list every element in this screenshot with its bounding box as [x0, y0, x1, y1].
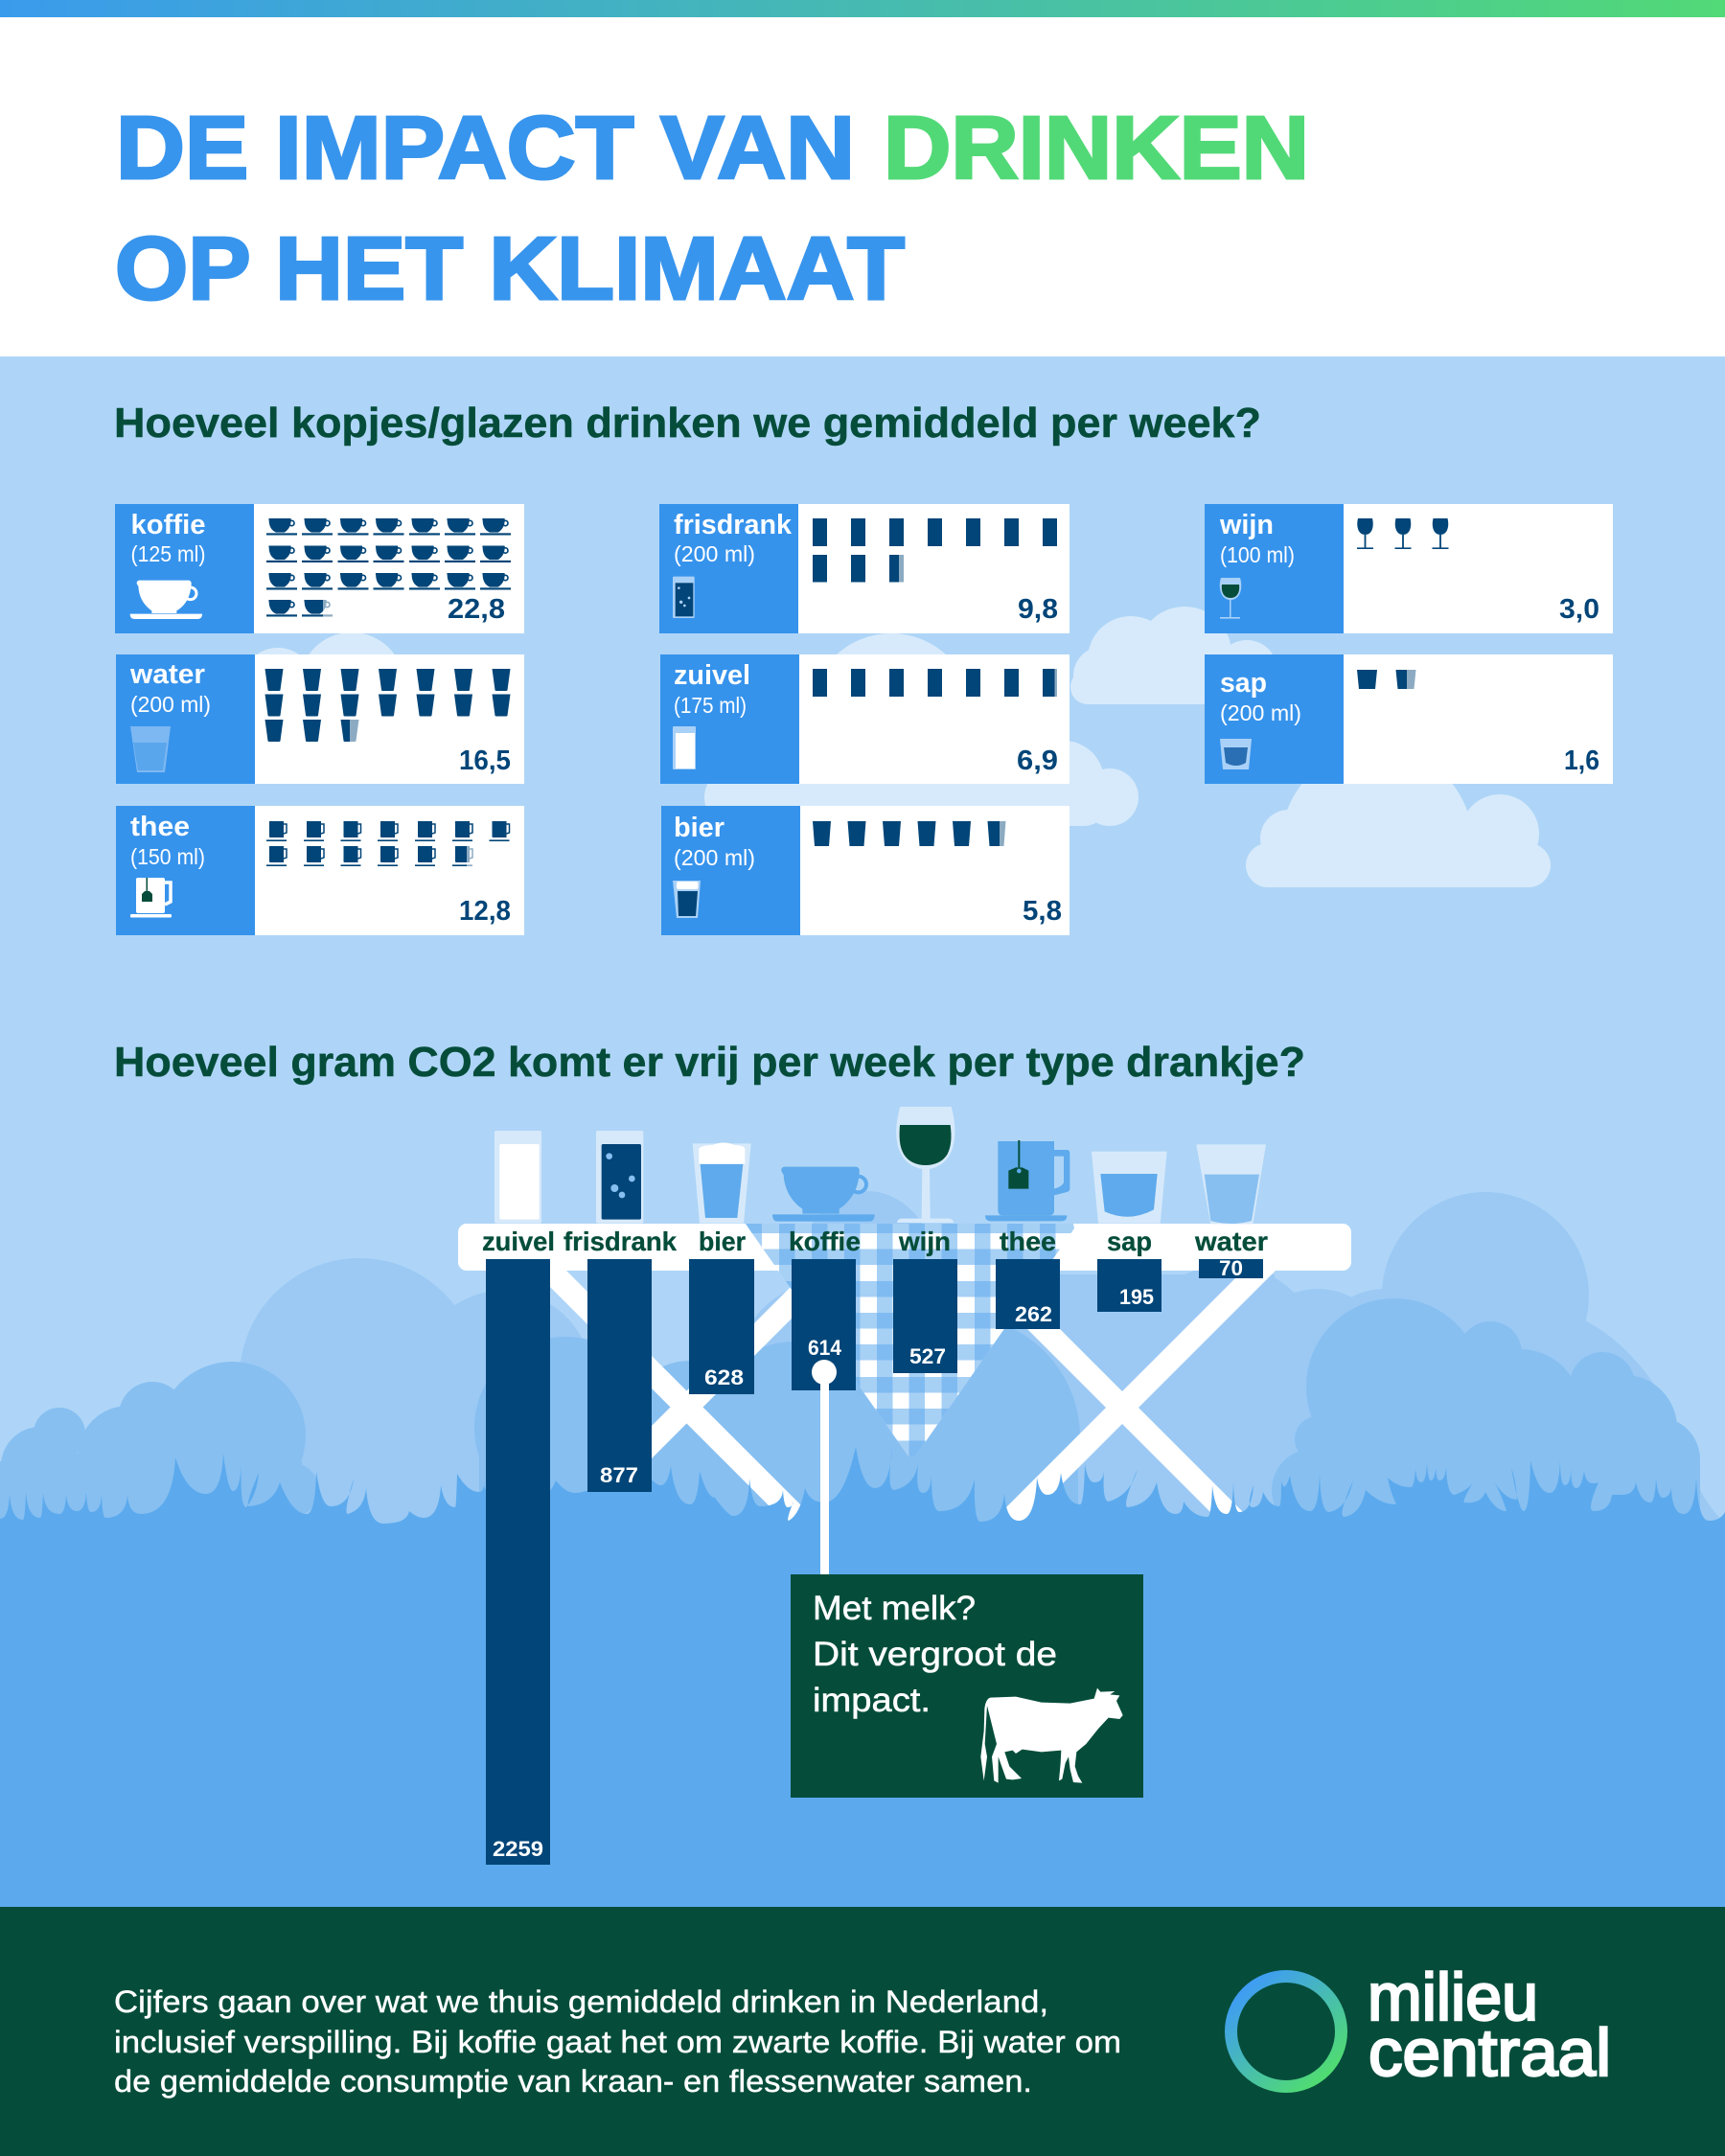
card: wijn: [1205, 504, 1613, 633]
title: DRINKEN: [884, 98, 1309, 197]
card: thee: (150 ml): [130, 844, 205, 869]
table labels: water: [1194, 1227, 1268, 1256]
clouds: [242, 607, 1551, 939]
value: frisdrank: 9,8: [1018, 594, 1058, 625]
pictogram: glasses 16,5: [264, 669, 510, 743]
title: OP HET KLIMAAT: [115, 218, 905, 318]
drink: thee mug: [985, 1140, 1070, 1221]
back trees: [240, 1191, 1725, 1533]
card: zuivel: zuivel: [674, 660, 750, 691]
card: zuivel: (175 ml): [674, 693, 747, 718]
pictogram: coffee cups 22,8: [266, 518, 511, 618]
table labels: koffie: [789, 1227, 861, 1256]
card: wijn: wijn: [1219, 510, 1274, 540]
card: wijn: (100 ml): [1220, 542, 1295, 567]
card: sap: sap: [1220, 668, 1267, 699]
bar: sap: [1097, 1259, 1162, 1312]
value: koffie: 22,8: [448, 594, 505, 625]
card: sap: (200 ml): [1220, 700, 1301, 725]
bar: frisdrank: 877: [600, 1463, 638, 1487]
value: wijn: 3,0: [1559, 594, 1599, 625]
logo: milieu centraal: milieu: [1368, 1960, 1538, 2034]
bar: koffie: 614: [808, 1336, 842, 1360]
card: water: [116, 654, 524, 784]
table labels: sap: [1107, 1227, 1152, 1256]
heading: co2 per week: Hoeveel gram CO2 komt er vrij per week per type drankje?: [114, 1039, 1305, 1086]
heading: cups per week: Hoeveel kopjes/glazen drinken we gemiddeld per week?: [114, 400, 1261, 447]
drink: koffie cup: [772, 1167, 875, 1222]
value: water: 16,5: [459, 745, 511, 776]
card: koffie: (125 ml): [130, 541, 205, 566]
table top: [458, 1224, 1351, 1271]
value: thee: 12,8: [459, 896, 511, 927]
callout: met melk: Dit vergroot de: [813, 1636, 1057, 1673]
drink: water glass: [1196, 1144, 1266, 1224]
icon: beer glass: [673, 881, 701, 918]
card: bier: bier: [674, 813, 724, 843]
card: bier: (200 ml): [674, 845, 755, 870]
table labels: bier: [699, 1227, 746, 1256]
table legs: [519, 1271, 1289, 1558]
pictogram: cartons 9,8: [813, 518, 1057, 583]
table labels: thee: [1000, 1227, 1056, 1256]
card: bier: [661, 806, 1070, 935]
bar: wijn: [893, 1259, 957, 1373]
callout: met melk: Met melk?: [813, 1590, 976, 1627]
card: sap: [1205, 654, 1613, 784]
card: koffie: [115, 504, 524, 633]
icon: water glass: [130, 726, 171, 772]
footer text: inclusief verspilling. Bij koffie gaat het om zwarte koffie. Bij water om: [114, 2025, 1121, 2059]
tablecloth: [746, 1224, 1074, 1456]
card: frisdrank: frisdrank: [674, 510, 793, 540]
callout: met melk: impact.: [813, 1682, 931, 1719]
callout: met melk: [791, 1574, 1143, 1798]
bar: koffie: [792, 1259, 856, 1390]
icon: coffee cup: [130, 581, 202, 619]
icon: milk glass: [673, 726, 696, 769]
table labels: frisdrank: [564, 1227, 677, 1256]
bar: wijn: 527: [909, 1344, 946, 1368]
card: thee: [116, 806, 524, 935]
bar: zuivel: [486, 1259, 550, 1865]
callout connector: spoon: [812, 1360, 837, 1575]
card: koffie: koffie: [130, 510, 205, 540]
pictogram: cartons 6,9: [813, 668, 1058, 698]
card: water: (200 ml): [130, 692, 211, 717]
grass: [0, 1447, 1725, 1907]
icon: cow: [980, 1688, 1123, 1783]
footer text: de gemiddelde consumptie van kraan- en flessenwater samen.: [114, 2064, 1032, 2099]
front bushes: [0, 1298, 1700, 1559]
card: frisdrank: [659, 504, 1070, 633]
table labels: [482, 1227, 1268, 1256]
table labels: zuivel: [482, 1227, 555, 1256]
footer text: Cijfers gaan over wat we thuis gemiddeld drinken in Nederland,: [114, 1984, 1048, 2019]
card: zuivel: [660, 654, 1070, 784]
pictogram: wine glasses 3,0: [1357, 518, 1449, 549]
icon: soda glass: [673, 577, 695, 618]
bar: thee: 262: [1015, 1302, 1052, 1326]
drink: wijn glass: [896, 1107, 954, 1223]
logo: milieu centraal: centraal: [1368, 2015, 1611, 2090]
bar: water: [1199, 1256, 1263, 1280]
icon: juice glass: [1220, 739, 1252, 769]
pictogram: juice glasses 1,6: [1357, 669, 1417, 690]
drink: frisdrank glass: [596, 1131, 643, 1224]
drink: zuivel glass: [494, 1131, 541, 1224]
icon: tea mug: [130, 878, 172, 918]
table labels: wijn: [898, 1227, 951, 1256]
background sky: [0, 356, 1725, 1918]
icon: wine glass: [1220, 578, 1241, 619]
value: zuivel: 6,9: [1017, 745, 1058, 776]
bar: bier: 628: [704, 1365, 744, 1389]
bar: frisdrank: [587, 1259, 652, 1492]
bar: sap: 195: [1119, 1285, 1154, 1309]
header band: [0, 0, 1725, 356]
bar: zuivel: 2259: [493, 1837, 543, 1861]
footer band: [0, 1907, 1725, 2156]
bar: thee: [996, 1259, 1060, 1329]
drink: sap glass: [1092, 1152, 1167, 1224]
drink: bier glass: [693, 1142, 751, 1224]
pictogram: beer glasses 5,8: [813, 820, 1007, 847]
logo: milieu centraal: [1230, 1960, 1611, 2090]
title: DE IMPACT VAN: [116, 98, 855, 197]
title: [115, 98, 1309, 318]
card: thee: thee: [130, 812, 190, 842]
value: bier: 5,8: [1023, 896, 1062, 927]
pictogram: mugs 12,8: [266, 821, 510, 867]
bar: water: 70: [1219, 1256, 1243, 1280]
card: water: water: [129, 659, 205, 690]
bar chart: co2 per drink: [486, 1256, 1263, 1865]
bar: bier: [689, 1259, 754, 1394]
value: sap: 1,6: [1564, 745, 1599, 776]
card: frisdrank: (200 ml): [674, 541, 755, 566]
footer text: [114, 1984, 1121, 2099]
